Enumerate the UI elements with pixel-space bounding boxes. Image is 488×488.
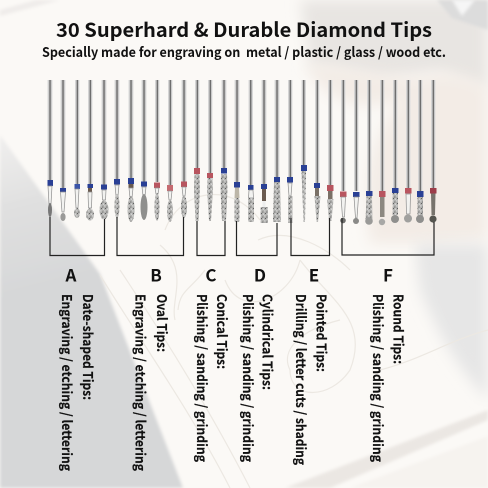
bracket B — [117, 217, 184, 256]
label: oval tips: Oval Tips: — [153, 294, 173, 352]
label: round tips: Round Tips: — [390, 294, 410, 364]
label: date-shaped tips: Date-shaped Tips: — [79, 294, 99, 400]
bracket D — [236, 221, 277, 256]
usage: conical tips: Plishing / sanding / grinding — [193, 294, 213, 462]
bracket A — [50, 217, 104, 256]
title: 30 Superhard & Durable Diamond Tips — [56, 14, 432, 43]
usage: oval tips: Engraving / etching / lettering — [132, 294, 152, 471]
letter D: D — [254, 262, 266, 286]
group B tips: oval burs — [114, 80, 187, 222]
usage: date-shaped tips: Engraving / etching / lettering — [58, 294, 78, 471]
bracket C — [197, 221, 225, 256]
group C tips: conical burs — [194, 80, 228, 221]
bracket F — [342, 218, 434, 255]
group F tips: round burs — [340, 80, 437, 225]
label: conical tips: Conical Tips: — [213, 294, 233, 369]
letter A: A — [65, 262, 77, 286]
usage: pointed tips: Drilling / letter cuts / shading — [292, 294, 312, 465]
bracket E — [291, 218, 330, 256]
letter B: B — [150, 262, 162, 286]
letter C: C — [205, 262, 217, 286]
letter E: E — [309, 262, 319, 286]
group D tips: cylindrical burs — [234, 80, 281, 223]
usage: round tips: Plishing / sanding / grinding — [369, 294, 389, 462]
group E tips: pointed burs — [287, 80, 334, 223]
label: cylindrical tips: Cylindrical Tips: — [258, 294, 278, 390]
subtitle: Specially made for engraving on metal / plastic / glass / wood etc. — [42, 41, 446, 61]
usage: cylindrical tips: Plishing / sanding / grinding — [239, 294, 259, 462]
group A tips: date-shaped burs — [48, 80, 108, 221]
label: pointed tips: Pointed Tips: — [312, 294, 332, 372]
letter F: F — [383, 262, 393, 286]
